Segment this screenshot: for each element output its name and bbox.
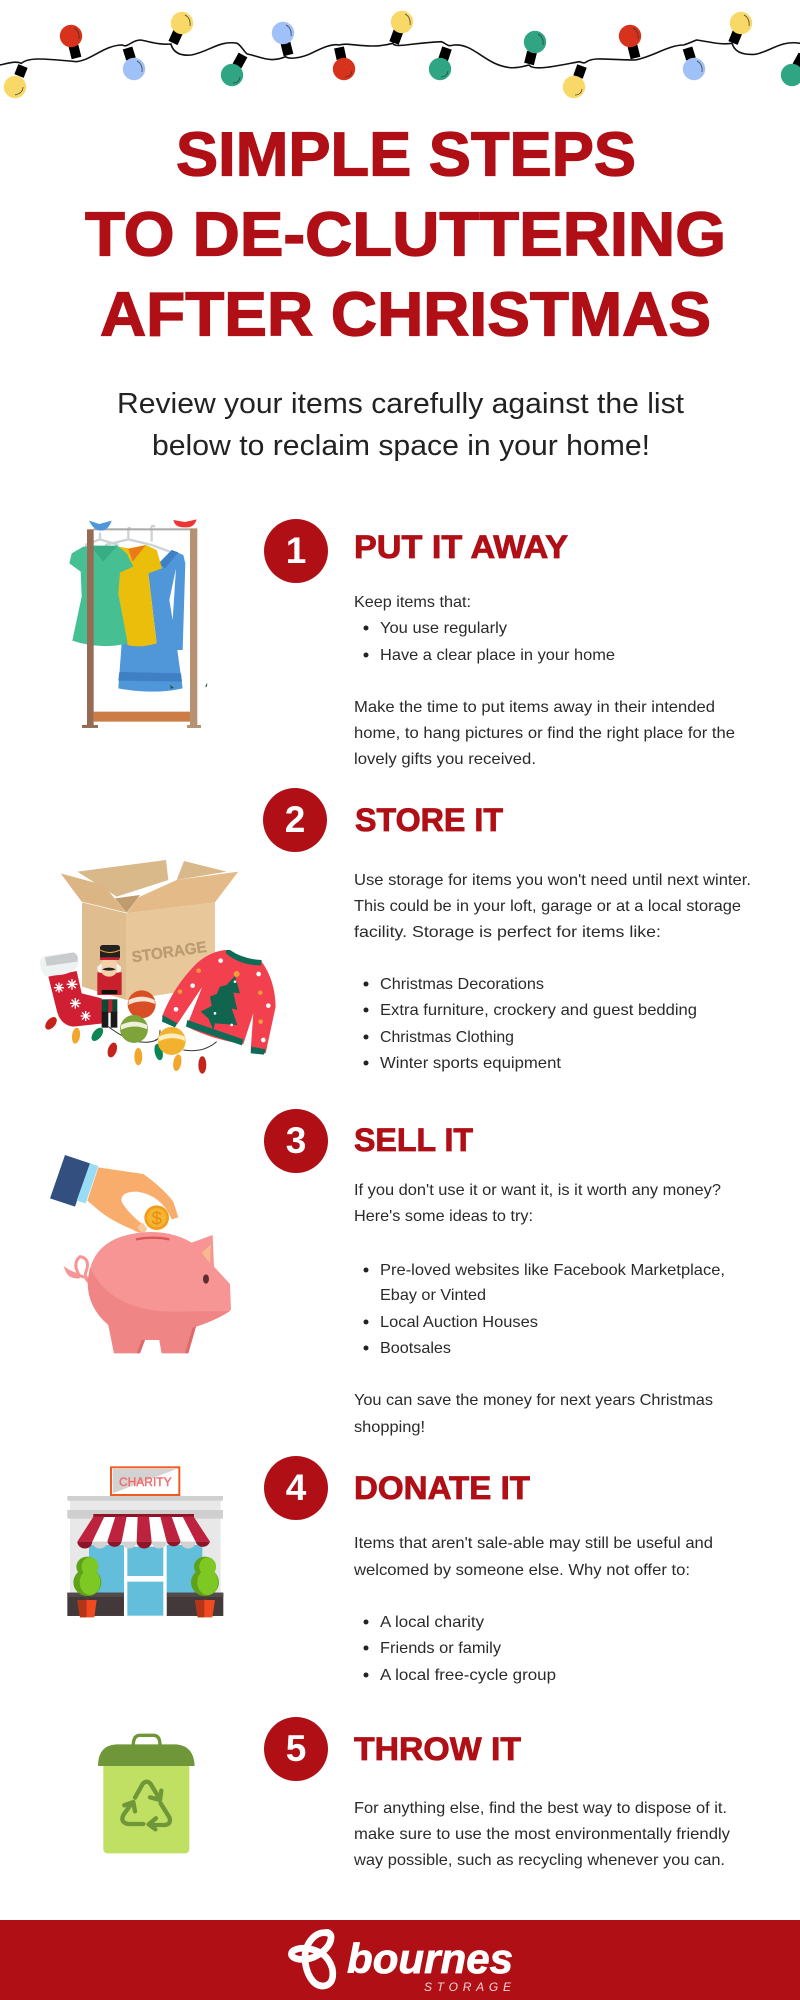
heading: donate it: DONATE IT <box>354 1470 530 1506</box>
body text: You use regularly <box>380 620 507 637</box>
step 5: throw it <box>264 1717 730 1869</box>
title: TO DE-CLUTTERING <box>85 200 726 270</box>
body text: Bootsales <box>380 1340 451 1357</box>
subtitle <box>117 388 684 462</box>
heading: put it away: PUT IT AWAY <box>354 529 568 565</box>
string of Christmas lights <box>0 11 800 98</box>
body text: Use storage for items you won't need until next winter. <box>354 872 751 889</box>
heading: throw it: THROW IT <box>354 1731 521 1767</box>
number badge 5 <box>264 1717 328 1781</box>
number badge 2 <box>263 788 327 852</box>
illustration: storage box with decorations <box>40 860 276 1074</box>
body text: shopping! <box>354 1419 425 1436</box>
number badge 4 <box>264 1456 328 1520</box>
illustration: hand and piggy bank <box>50 1155 231 1353</box>
number badge 3 <box>264 1109 328 1173</box>
illustration: recycling bin <box>98 1735 195 1853</box>
illustration: charity shop <box>67 1467 223 1617</box>
heading: store it: STORE IT <box>355 802 503 838</box>
step 4: donate it <box>264 1456 713 1684</box>
body text: Pre-loved websites like Facebook Marketplace, <box>380 1262 725 1279</box>
body text: For anything else, find the best way to dispose of it. <box>354 1800 727 1817</box>
body text: home, to hang pictures or find the right place for the <box>354 725 735 742</box>
body text <box>354 872 751 1072</box>
step 1: put it away <box>264 519 735 768</box>
body text: lovely gifts you received. <box>354 751 536 768</box>
logo: ribbon mark <box>291 1932 333 1986</box>
logo: wordmark: bournes <box>347 1935 513 1982</box>
body text: This could be in your loft, garage or at a local storage <box>354 898 741 915</box>
title <box>85 120 726 350</box>
title: AFTER CHRISTMAS <box>100 280 711 350</box>
heading: sell it: SELL IT <box>354 1122 473 1158</box>
number badge 5: 5 <box>286 1728 306 1769</box>
number badge 1: 1 <box>286 530 306 571</box>
box label: STORAGE <box>131 939 208 966</box>
charity sign <box>111 1467 179 1495</box>
footer band with logo <box>0 1920 800 2000</box>
body text: You can save the money for next years Christmas <box>354 1392 713 1409</box>
coin dollar sign: $ <box>151 1208 162 1229</box>
logo: storage strapline: STORAGE <box>424 1980 512 1994</box>
number badge 1 <box>264 519 328 583</box>
body text: If you don't use it or want it, is it worth any money? <box>354 1182 721 1199</box>
body text: A local free-cycle group <box>380 1667 556 1684</box>
body text: Friends or family <box>380 1640 501 1657</box>
body text: facility. Storage is perfect for items like: <box>354 924 661 941</box>
subtitle: below to reclaim space in your home! <box>152 430 650 462</box>
body text: Ebay or Vinted <box>380 1287 486 1304</box>
number badge 4: 4 <box>286 1467 307 1508</box>
charity sign: CHARITY <box>119 1475 172 1489</box>
body text <box>353 1800 730 1869</box>
body text: Items that aren't sale-able may still be useful and <box>354 1535 713 1552</box>
body text <box>354 594 735 768</box>
step 3: sell it <box>264 1109 725 1436</box>
body text: Extra furniture, crockery and guest bedding <box>380 1002 697 1019</box>
body text: make sure to use the most environmentally friendly <box>354 1826 730 1843</box>
illustration: clothes rack <box>69 519 207 728</box>
body text: Here's some ideas to try: <box>354 1208 533 1225</box>
body text <box>353 1535 713 1684</box>
body text: Christmas Clothing <box>380 1029 514 1046</box>
body text: Christmas Decorations <box>380 976 544 993</box>
body text: Have a clear place in your home <box>380 647 615 664</box>
body text <box>354 1182 725 1436</box>
number badge 2: 2 <box>285 799 305 840</box>
number badge 3: 3 <box>286 1120 306 1161</box>
body text: A local charity <box>380 1614 484 1631</box>
body text: Local Auction Houses <box>380 1314 538 1331</box>
body text: Make the time to put items away in their intended <box>354 699 715 716</box>
body text: way possible, such as recycling whenever you can. <box>353 1852 725 1869</box>
step 2: store it <box>263 788 751 1072</box>
body text: welcomed by someone else. Why not offer to: <box>353 1562 690 1579</box>
subtitle: Review your items carefully against the list <box>117 388 684 420</box>
body text: Winter sports equipment <box>380 1055 562 1072</box>
body text: Keep items that: <box>354 594 471 611</box>
title: SIMPLE STEPS <box>176 120 636 190</box>
